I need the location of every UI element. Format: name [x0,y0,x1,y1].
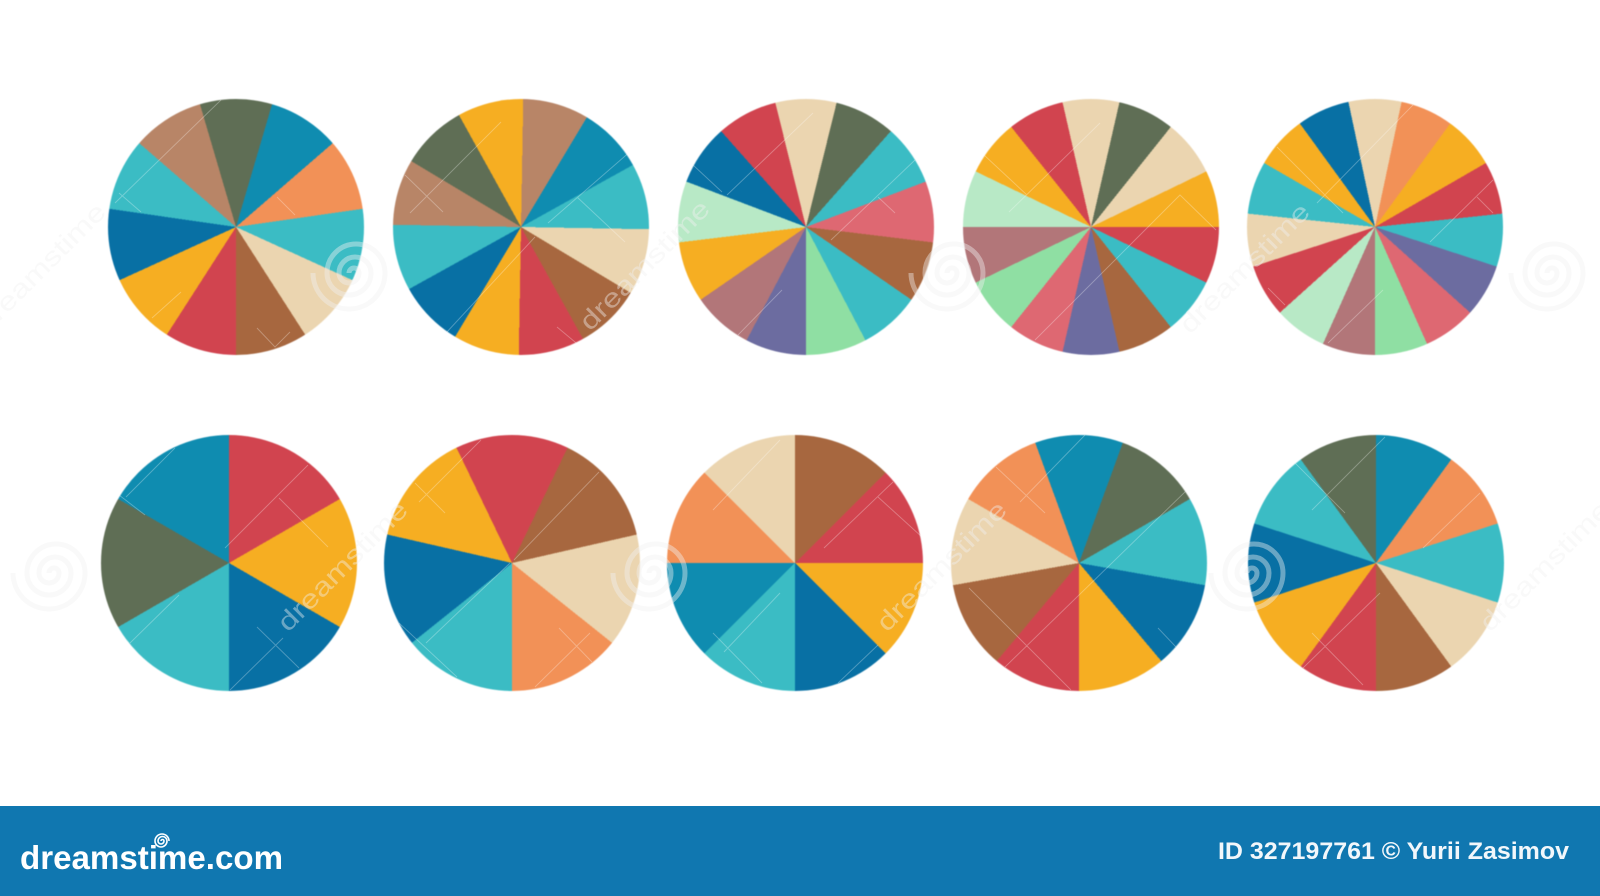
watermark text [0,193,1600,637]
footer banner [0,806,1600,896]
watermark spirals [13,244,1583,609]
pie chart row 1, 12 slices [393,98,649,354]
footer logo text: dreamstime.com [20,839,283,876]
watermark text: dreamstime [870,494,1013,637]
pie chart row 1, 15 slices [1247,98,1503,354]
icon: logo spiral [155,834,169,847]
watermark text: dreamstime [1173,196,1316,339]
watermark text: dreamstime [1473,494,1600,637]
pie chart row 2, 9 slices [951,435,1207,691]
footer image id and credit: ID 327197761 © Yurii Zasimov [1218,838,1570,865]
pie chart row 2, 7 slices [384,435,640,691]
pie chart row 2, 6 slices [101,435,357,691]
pie chart row 1, 11 slices [108,98,364,354]
pie chart row 2, 10 slices [1248,435,1504,691]
pie chart row 1, 13 slices [678,98,934,354]
pie chart row 2, 8 slices [667,435,923,691]
pie chart row 1, 14 slices [963,98,1219,354]
watermark text: dreamstime [573,193,716,336]
watermark text: dreamstime [271,494,414,637]
